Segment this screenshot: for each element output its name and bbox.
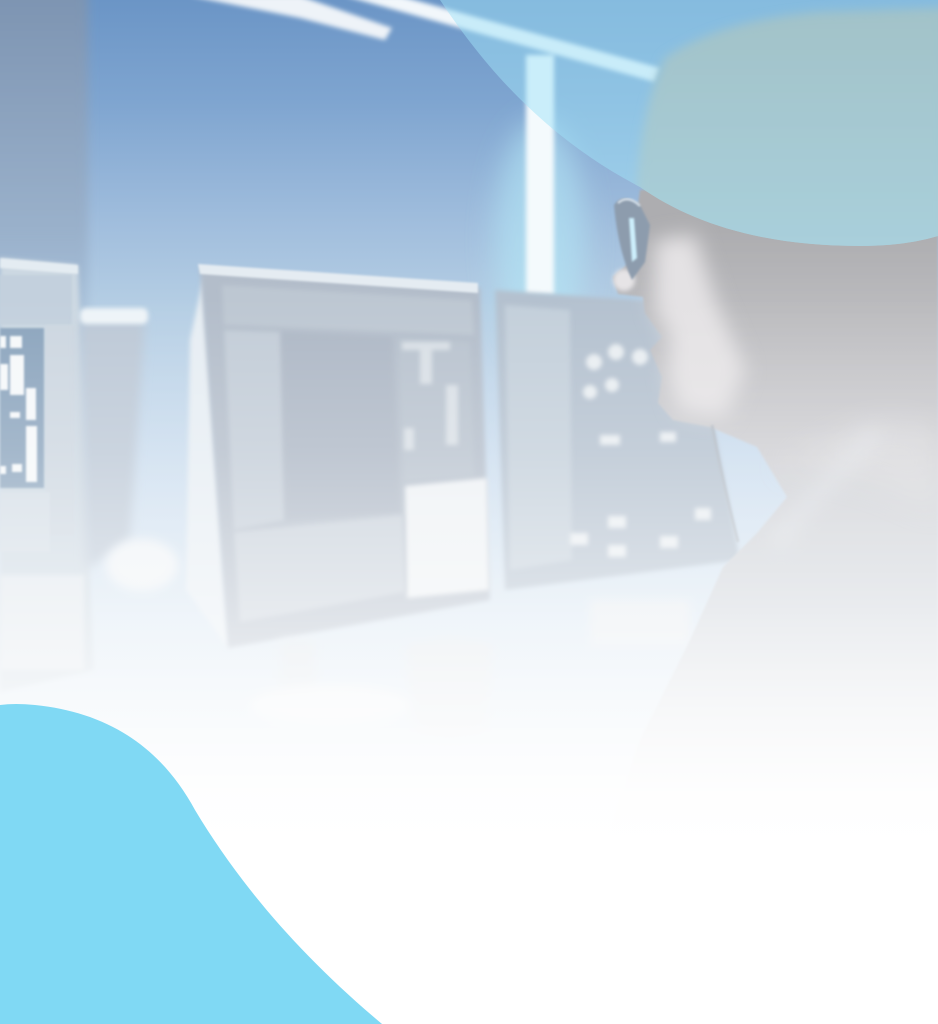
face highlight (654, 235, 745, 418)
monitor: right (495, 290, 740, 590)
operator silhouette (600, 180, 938, 860)
shoulder light band (780, 421, 938, 510)
headset wire (712, 425, 738, 542)
desk items (250, 600, 690, 738)
cap blob: translucent top right (430, 0, 938, 260)
glasses (614, 198, 650, 280)
collar highlight (770, 425, 885, 555)
monitor: rear small (80, 308, 178, 591)
monitor: far left (0, 258, 94, 692)
nose highlight (613, 269, 635, 291)
head, neck and jacket (600, 180, 938, 860)
ceiling lights (190, 0, 660, 295)
monitor: centre (186, 264, 490, 648)
cyan blob: bottom left (0, 704, 382, 1024)
